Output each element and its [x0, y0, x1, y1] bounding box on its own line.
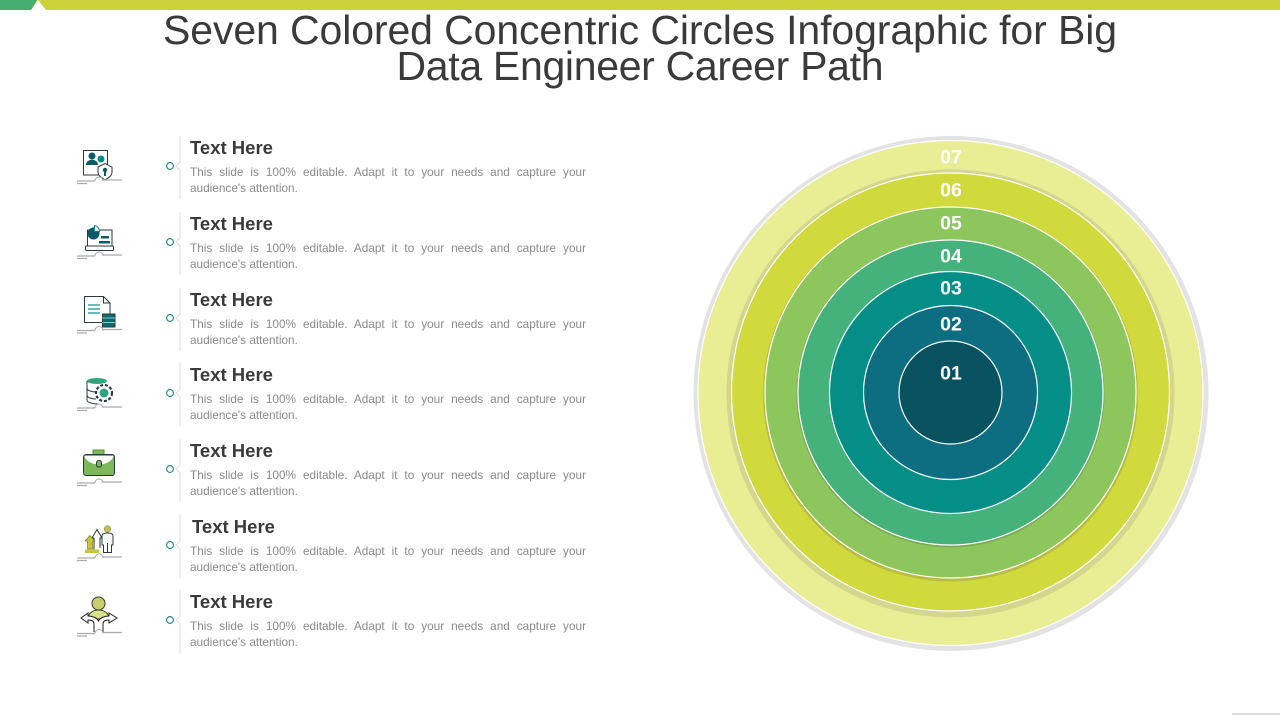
- row 1: text item with profile security icon: [77, 136, 586, 199]
- item description: This slide is 100% editable. Adapt it to your needs and capture your audience's attention.: [190, 316, 586, 346]
- item description: This slide is 100% editable. Adapt it to your needs and capture your audience's attention.: [190, 392, 586, 422]
- row 2: text item with laptop icon: [77, 212, 586, 275]
- ring 07: [694, 136, 1208, 651]
- item heading: Text Here: [190, 591, 273, 612]
- connector: [176, 590, 180, 653]
- row 5: text item with briefcase icon: [77, 439, 586, 502]
- ring 03: [830, 272, 1072, 514]
- icon: person at crossroads: [77, 590, 180, 653]
- row 6: text item with career growth icon: [77, 515, 586, 578]
- ring 01: 01: [940, 362, 962, 384]
- item heading: Text Here: [192, 516, 275, 536]
- item heading: Text Here: [190, 137, 273, 158]
- item description: This slide is 100% editable. Adapt it to your needs and capture your audience's attention.: [190, 619, 586, 649]
- ring 01: [899, 341, 1002, 444]
- item heading: Text Here: [190, 440, 273, 460]
- item description: This slide is 100% editable. Adapt it to your needs and capture your audience's attention.: [190, 544, 586, 574]
- icon: database gear: [77, 363, 180, 426]
- item heading: Text Here: [190, 288, 273, 310]
- connector: [176, 136, 180, 199]
- icon: person with up arrows: [77, 515, 180, 578]
- item heading: Text Here: [190, 212, 273, 234]
- ring 07: 07: [940, 146, 962, 168]
- icon: briefcase: [77, 439, 180, 502]
- row 7: text item with crossroads person icon: [77, 590, 586, 653]
- top bar: [0, 0, 1280, 10]
- ring 05: 05: [940, 212, 962, 234]
- item heading: Text Here: [190, 364, 273, 385]
- ring 06: 06: [940, 180, 962, 202]
- ring 02: 02: [940, 314, 962, 336]
- item description: This slide is 100% editable. Adapt it to your needs and capture your audience's attention.: [190, 165, 586, 195]
- connector: [176, 438, 180, 502]
- title: Data Engineer Career Path: [396, 43, 884, 89]
- icon: document database: [77, 288, 180, 351]
- connector: [176, 288, 180, 350]
- item description: This slide is 100% editable. Adapt it to your needs and capture your audience's attention.: [190, 468, 586, 498]
- ring 06: [726, 170, 1174, 618]
- row 3: text item with document icon: [77, 288, 586, 351]
- ring 04: [796, 240, 1104, 548]
- connector: [176, 212, 180, 274]
- connector: [176, 363, 180, 426]
- concentric circles chart: [694, 136, 1208, 651]
- ring 02: [864, 306, 1038, 480]
- row 4: text item with database gear icon: [77, 363, 586, 426]
- item description: This slide is 100% editable. Adapt it to your needs and capture your audience's attention.: [190, 240, 586, 270]
- icon: profile shield: [77, 136, 180, 199]
- ring 05: [763, 206, 1138, 582]
- ring 03: 03: [940, 278, 962, 300]
- footer mark: [1232, 713, 1280, 715]
- icon: laptop chart: [77, 212, 180, 275]
- connector: [176, 514, 180, 578]
- ring 04: 04: [940, 246, 962, 268]
- title: [163, 10, 1117, 89]
